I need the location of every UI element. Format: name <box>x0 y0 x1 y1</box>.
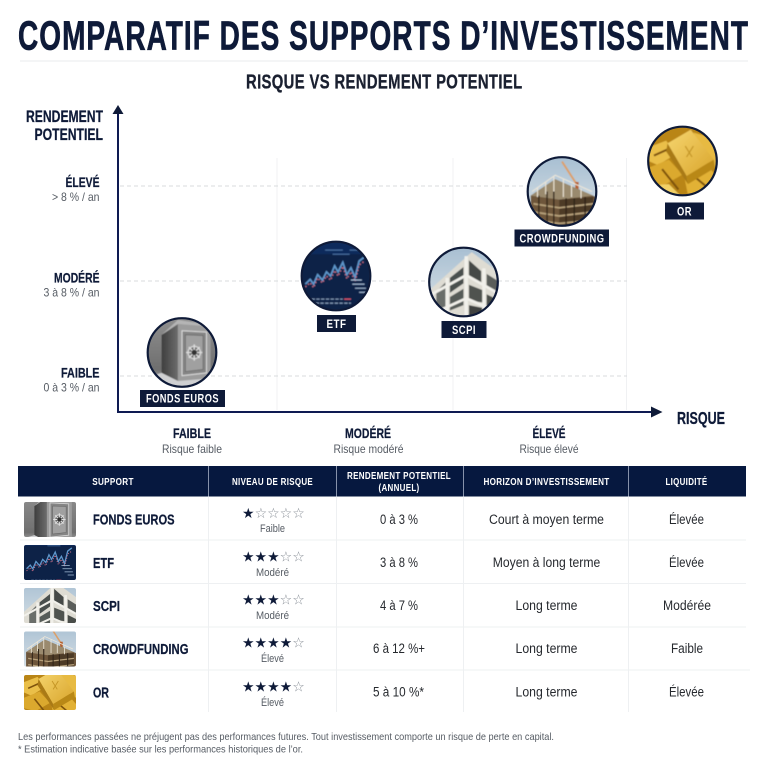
row: scpi: ★★★☆☆ <box>242 592 305 608</box>
footnote: Les performances passées ne préjugent pas des performances futures. Tout investissement comporte un risque de perte en capital. <box>18 731 554 743</box>
y axis arrow <box>112 105 124 412</box>
x axis arrow <box>117 406 662 418</box>
row: or <box>24 675 704 710</box>
row: or: OR <box>93 686 109 702</box>
y level: eleve: > 8 % / an <box>52 190 100 204</box>
row: crowdfunding: 6 à 12 %+ <box>373 641 425 656</box>
point: or: OR <box>677 204 692 218</box>
y axis title <box>26 108 103 144</box>
point: scpi <box>429 248 498 338</box>
x level: modere: Risque modéré <box>334 442 404 456</box>
table header: NIVEAU DE RISQUE <box>232 476 313 488</box>
point: or <box>648 127 717 220</box>
row: crowdfunding: Long terme <box>516 641 578 656</box>
x level: eleve <box>520 425 579 456</box>
comparison table <box>18 466 750 718</box>
x level: faible: FAIBLE <box>173 425 211 441</box>
row: scpi: Modéré <box>256 610 289 622</box>
y level: faible <box>44 364 100 394</box>
row: crowdfunding: Élevé <box>261 652 284 665</box>
x axis title: RISQUE <box>677 408 725 428</box>
row: fonds euros: 0 à 3 % <box>380 512 418 527</box>
row: scpi: Long terme <box>516 598 578 613</box>
footnote <box>18 731 554 756</box>
chart: risk vs return <box>26 105 725 456</box>
x level: eleve: ÉLEVÉ <box>532 425 566 441</box>
y level: modere: 3 à 8 % / an <box>44 286 100 300</box>
row: fonds euros: ★☆☆☆☆ <box>242 506 305 522</box>
y level: eleve: ÉLEVÉ <box>66 174 100 190</box>
row: etf <box>24 545 704 580</box>
row: crowdfunding: ★★★★☆ <box>242 636 305 652</box>
table header: (ANNUEL) <box>378 482 420 494</box>
y level: faible: FAIBLE <box>61 364 100 380</box>
row: or: Élevé <box>261 696 284 709</box>
row: etf: Élevée <box>669 555 704 570</box>
x level: modere: MODÉRÉ <box>345 425 391 441</box>
row: crowdfunding: CROWDFUNDING <box>93 642 188 658</box>
point: scpi: SCPI <box>452 323 476 337</box>
subtitle: RISQUE VS RENDEMENT POTENTIEL <box>246 72 522 94</box>
row: etf: ★★★☆☆ <box>242 550 305 566</box>
point: fonds euros <box>140 318 225 407</box>
row: etf: Moyen à long terme <box>493 555 600 570</box>
point: etf <box>302 242 370 332</box>
table header: SUPPORT <box>92 476 134 488</box>
row: fonds euros: Élevée <box>669 512 704 527</box>
point: crowdfunding: CROWDFUNDING <box>520 232 604 246</box>
y level: faible: 0 à 3 % / an <box>44 380 100 394</box>
y level: modere <box>44 270 100 300</box>
table header: RENDEMENT POTENTIEL <box>347 470 451 482</box>
row: scpi: 4 à 7 % <box>380 598 418 613</box>
point: etf: ETF <box>326 317 346 331</box>
row: or: ★★★★☆ <box>242 680 305 696</box>
row: fonds euros: Faible <box>260 523 285 535</box>
row: crowdfunding <box>24 632 702 666</box>
x level: faible: Risque faible <box>162 442 222 456</box>
y level: modere: MODÉRÉ <box>54 270 100 286</box>
row: crowdfunding: Faible <box>671 641 703 656</box>
point: fonds euros: FONDS EUROS <box>146 392 219 406</box>
x level: eleve: Risque élevé <box>520 442 579 456</box>
row: etf: 3 à 8 % <box>380 555 418 570</box>
row: etf: ETF <box>93 556 114 572</box>
row: etf: Modéré <box>256 567 289 579</box>
y axis title: POTENTIEL <box>34 126 103 144</box>
row: or: Long terme <box>516 684 578 700</box>
row: or: Élevée <box>669 684 704 700</box>
point: crowdfunding <box>514 157 609 246</box>
footnote: * Estimation indicative basée sur les performances historiques de l’or. <box>18 744 303 756</box>
y axis title: RENDEMENT <box>26 108 103 126</box>
table header: HORIZON D’INVESTISSEMENT <box>484 476 610 488</box>
y level: eleve <box>52 174 100 204</box>
row: fonds euros <box>24 502 704 537</box>
table header <box>18 466 746 496</box>
row: fonds euros: Court à moyen terme <box>489 512 604 527</box>
row: or: 5 à 10 %* <box>373 684 425 700</box>
row: scpi: Modérée <box>663 598 711 613</box>
row: scpi <box>24 588 710 623</box>
x level: faible <box>162 425 222 456</box>
row: scpi: SCPI <box>93 599 120 615</box>
table header: LIQUIDITÉ <box>666 475 708 488</box>
row: fonds euros: FONDS EUROS <box>93 512 175 528</box>
x level: modere <box>334 425 404 456</box>
